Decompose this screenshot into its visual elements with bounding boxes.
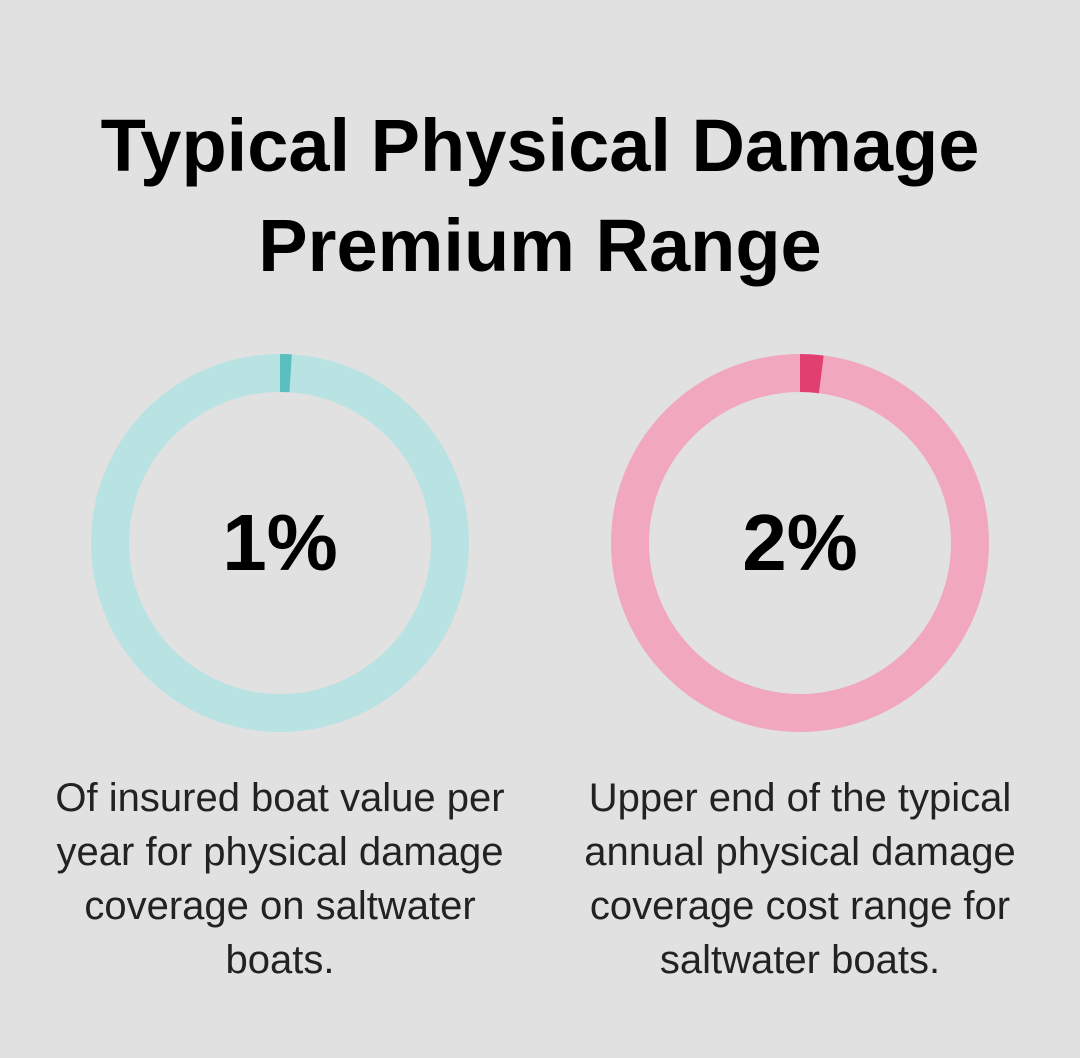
donut 2: 2% [742, 498, 858, 587]
title [101, 104, 979, 287]
text: description 1: Of insured boat value per year for physical damage coverage on saltwater boats. [55, 776, 505, 982]
title: Typical Physical Damage [101, 104, 979, 187]
text: description 2: Upper end of the typical annual physical damage coverage cost range for saltwater boats. [584, 776, 1016, 982]
donut 1: 1% [222, 498, 338, 587]
donut 2 [630, 373, 970, 713]
title: Premium Range [258, 204, 822, 287]
donut 1 [110, 373, 450, 713]
